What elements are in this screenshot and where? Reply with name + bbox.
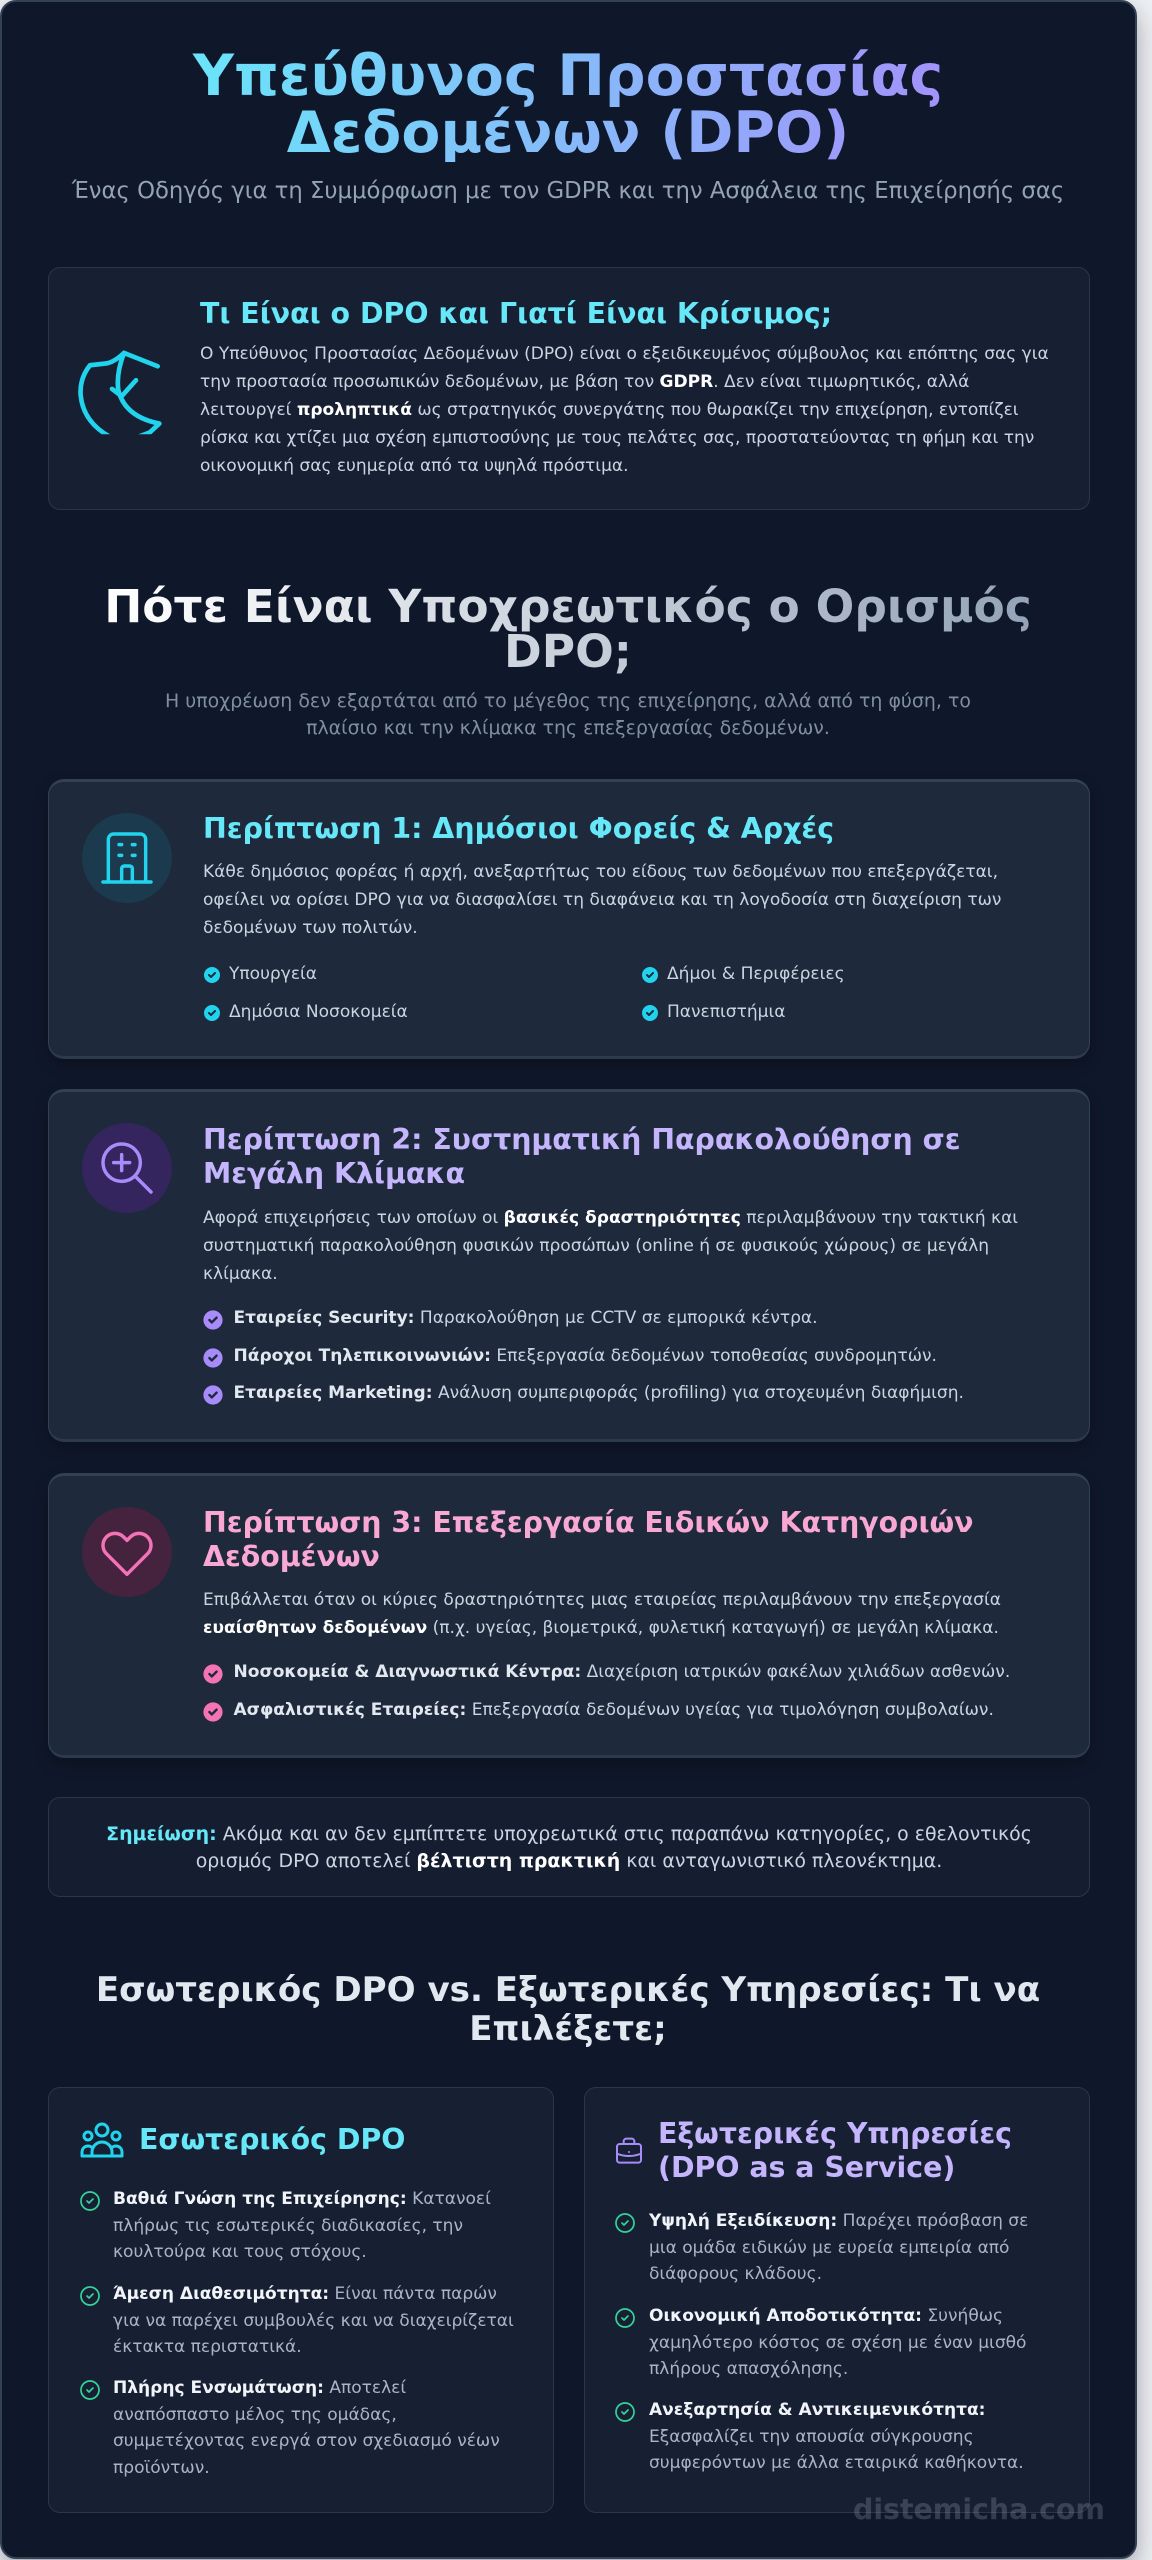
list item: deep knowledge: Βαθιά Γνώση της Επιχείρησης: Κατανοεί <box>113 2189 491 2209</box>
panel: case 2 <box>48 1089 1090 1442</box>
heading: what is a DPO: Τι Είναι ο DPO και Γιατί Είναι Κρίσιμος; <box>200 297 832 330</box>
watermark: distemicha.com <box>853 2493 1105 2526</box>
icon: magnifier <box>82 1123 172 1213</box>
callout: note: ορισμός DPO αποτελεί βέλτιστη πρακτική και ανταγωνιστικό πλεονέκτημα. <box>196 1850 942 1872</box>
subheading: when mandatory: Η υποχρέωση δεν εξαρτάται από το μέγεθος της επιχείρησης, αλλά από τη φύση, το <box>165 690 971 712</box>
heading: case 2: Μεγάλη Κλίμακα <box>203 1157 465 1190</box>
subheading: when mandatory <box>165 690 971 739</box>
list item: integration: συμμετέχοντας ενεργά στον σχεδιασμό νέων <box>113 2431 500 2451</box>
list item: expertise: διάφορους κλάδους. <box>649 2264 822 2284</box>
heading: case 1: Περίπτωση 1: Δημόσιοι Φορείς & Αρχές <box>203 812 834 845</box>
text: what is a DPO: την προστασία προσωπικών δεδομένων, με βάση τον GDPR. Δεν είναι τιμωρητικός, αλλά <box>200 372 969 392</box>
list item: marketing: Εταιρείες Marketing: Ανάλυση συμπεριφοράς (profiling) για στοχευμένη διαφήμιση. <box>234 1383 964 1403</box>
text: case 1: δεδομένων των πολιτών. <box>203 918 418 938</box>
callout: note <box>48 1797 1090 1897</box>
panel: case 3 <box>48 1473 1090 1758</box>
icon: users <box>80 2122 124 2158</box>
list item: integration <box>80 2378 500 2478</box>
list: case 2 <box>203 1308 964 1405</box>
text: what is a DPO: Ο Υπεύθυνος Προστασίας Δεδομένων (DPO) είναι ο εξειδικευμένος σύμβουλος και επόπτης σας για <box>200 344 1049 364</box>
icon: broken shield <box>78 350 162 434</box>
title: Δεδομένων (DPO) <box>287 100 849 166</box>
text: case 1 <box>203 862 1001 938</box>
icon: building <box>82 813 172 903</box>
heading: case 2: Περίπτωση 2: Συστηματική Παρακολούθηση σε <box>203 1123 960 1156</box>
text: case 2: κλίμακα. <box>203 1264 278 1284</box>
text: case 2: Αφορά επιχειρήσεις των οποίων οι βασικές δραστηριότητες περιλαμβάνουν την τακτική και <box>203 1208 1018 1228</box>
list item: integration: προϊόντων. <box>113 2458 210 2478</box>
heading: case 3: Περίπτωση 3: Επεξεργασία Ειδικών Κατηγοριών <box>203 1506 974 1539</box>
text: case 3: Επιβάλλεται όταν οι κύριες δραστηριότητες μιας εταιρείας περιλαμβάνουν την επεξεργασία <box>203 1590 1001 1610</box>
text: case 2 <box>203 1208 1018 1284</box>
heading: comparison: Επιλέξετε; <box>469 2009 667 2049</box>
list item: hospitals: Δημόσια Νοσοκομεία <box>229 1002 408 1022</box>
heading: case 2 <box>203 1123 960 1190</box>
heading: case 3: Δεδομένων <box>203 1540 380 1573</box>
list item: independence: συμφερόντων με άλλα εταιρικά καθήκοντα. <box>649 2453 1024 2473</box>
list item: availability: έκτακτα περιστατικά. <box>113 2337 302 2357</box>
text: what is a DPO: οικονομική σας ευημερία από τα υψηλά πρόστιμα. <box>200 456 629 476</box>
subtitle: Ένας Οδηγός για τη Συμμόρφωση με τον GDPR και την Ασφάλεια της Επιχείρησής σας <box>72 178 1064 204</box>
heading: when mandatory: Πότε Είναι Υποχρεωτικός ο Ορισμός <box>104 580 1032 633</box>
panel: case 1 <box>48 779 1090 1059</box>
title <box>0 48 1136 162</box>
list item: availability <box>80 2284 514 2357</box>
list item: independence: Ανεξαρτησία & Αντικειμενικότητα: <box>649 2400 985 2420</box>
heading: comparison <box>96 1970 1040 2049</box>
text: case 1: οφείλει να ορίσει DPO για να διασφαλίσει τη διαφάνεια και τη λογοδοσία στη διαχείριση των <box>203 890 1001 910</box>
list: external services <box>615 2211 1028 2473</box>
list item: security: Εταιρείες Security: Παρακολούθηση με CCTV σε εμπορικά κέντρα. <box>234 1308 818 1328</box>
heading: external services: (DPO as a Service) <box>658 2151 955 2184</box>
callout: note: Σημείωση: Ακόμα και αν δεν εμπίπτετε υποχρεωτικά στις παραπάνω κατηγορίες, ο εθελοντικός <box>106 1823 1032 1845</box>
panel: internal DPO <box>48 2087 554 2513</box>
list item: integration: αναπόσπαστο μέλος της ομάδας, <box>113 2405 397 2425</box>
panel: what is a DPO <box>48 267 1090 510</box>
list item: deep knowledge: κουλτούρα και τους στόχους. <box>113 2242 367 2262</box>
heading: case 3 <box>203 1506 974 1573</box>
icon: heart <box>82 1507 172 1597</box>
subheading: when mandatory: πλαίσιο και την κλίμακα της επεξεργασίας δεδομένων. <box>306 717 830 739</box>
list item: expertise: μια ομάδα ειδικών με ευρεία εμπειρία από <box>649 2238 1009 2258</box>
text: what is a DPO <box>200 344 1049 476</box>
list item: deep knowledge: πλήρως τις εσωτερικές διαδικασίες, την <box>113 2216 463 2236</box>
heading: external services <box>658 2117 1012 2184</box>
list item: cost efficiency: Οικονομική Αποδοτικότητα: Συνήθως <box>649 2306 1003 2326</box>
text: case 3 <box>203 1590 1001 1638</box>
list item: ministries: Υπουργεία <box>229 964 317 984</box>
list item: cost efficiency: πλήρους απασχόλησης. <box>649 2359 848 2379</box>
list item: expertise: Υψηλή Εξειδίκευση: Παρέχει πρόσβαση σε <box>649 2211 1028 2231</box>
list item: cost efficiency <box>615 2306 1026 2379</box>
text: case 1: Κάθε δημόσιος φορέας ή αρχή, ανεξαρτήτως του είδους των δεδομένων που επεξεργάζεται, <box>203 862 998 882</box>
list: internal DPO <box>80 2189 514 2478</box>
list: case 1 <box>204 964 845 1022</box>
list item: municipalities: Δήμοι & Περιφέρειες <box>667 964 845 984</box>
list item: insurance: Ασφαλιστικές Εταιρείες: Επεξεργασία δεδομένων υγείας για τιμολόγηση συμβολαίων. <box>234 1700 994 1720</box>
panel: external services <box>584 2087 1090 2513</box>
text: what is a DPO: λειτουργεί προληπτικά ως στρατηγικός συνεργάτης που θωρακίζει την επιχείρηση, εντοπίζει <box>200 400 1019 420</box>
heading: when mandatory: DPO; <box>504 625 632 678</box>
title: Υπεύθυνος Προστασίας <box>193 43 943 109</box>
text: what is a DPO: ρίσκα και χτίζει μια σχέση εμπιστοσύνης με τους πελάτες σας, προστατεύοντας τη φήμη και την <box>200 428 1034 448</box>
list item: hospitals and diagnostics: Νοσοκομεία & Διαγνωστικά Κέντρα: Διαχείριση ιατρικών φακέλων χιλιάδων ασθενών. <box>234 1662 1010 1682</box>
heading: internal DPO: Εσωτερικός DPO <box>139 2123 405 2156</box>
heading: comparison: Εσωτερικός DPO vs. Εξωτερικές Υπηρεσίες: Τι να <box>96 1970 1040 2010</box>
list item: expertise <box>615 2211 1028 2284</box>
list item: independence: Εξασφαλίζει την απουσία σύγκρουσης <box>649 2427 974 2447</box>
list item: cost efficiency: χαμηλότερο κόστος σε σχέση με έναν μισθό <box>649 2333 1026 2353</box>
text: case 2: συστηματική παρακολούθηση φυσικών προσώπων (online ή σε φυσικούς χώρους) σε μεγάλη <box>203 1236 989 1256</box>
text: case 3: ευαίσθητων δεδομένων (π.χ. υγείας, βιομετρικά, φυλετική καταγωγή) σε μεγάλη κλίμακα. <box>203 1618 999 1638</box>
heading: when mandatory <box>0 585 1136 674</box>
heading: external services: Εξωτερικές Υπηρεσίες <box>658 2117 1012 2150</box>
list item: availability: για να παρέχει συμβουλές και να διαχειρίζεται <box>113 2311 514 2331</box>
list item: deep knowledge <box>80 2189 491 2262</box>
list: case 3 <box>203 1662 1010 1722</box>
list item: telecom: Πάροχοι Τηλεπικοινωνιών: Επεξεργασία δεδομένων τοποθεσίας συνδρομητών. <box>234 1346 937 1366</box>
list item: availability: Άμεση Διαθεσιμότητα: Είναι πάντα παρών <box>113 2284 497 2304</box>
list item: universities: Πανεπιστήμια <box>667 1002 785 1022</box>
icon: briefcase <box>616 2138 642 2164</box>
list item: independence <box>615 2400 1024 2473</box>
list item: integration: Πλήρης Ενσωμάτωση: Αποτελεί <box>113 2378 406 2398</box>
